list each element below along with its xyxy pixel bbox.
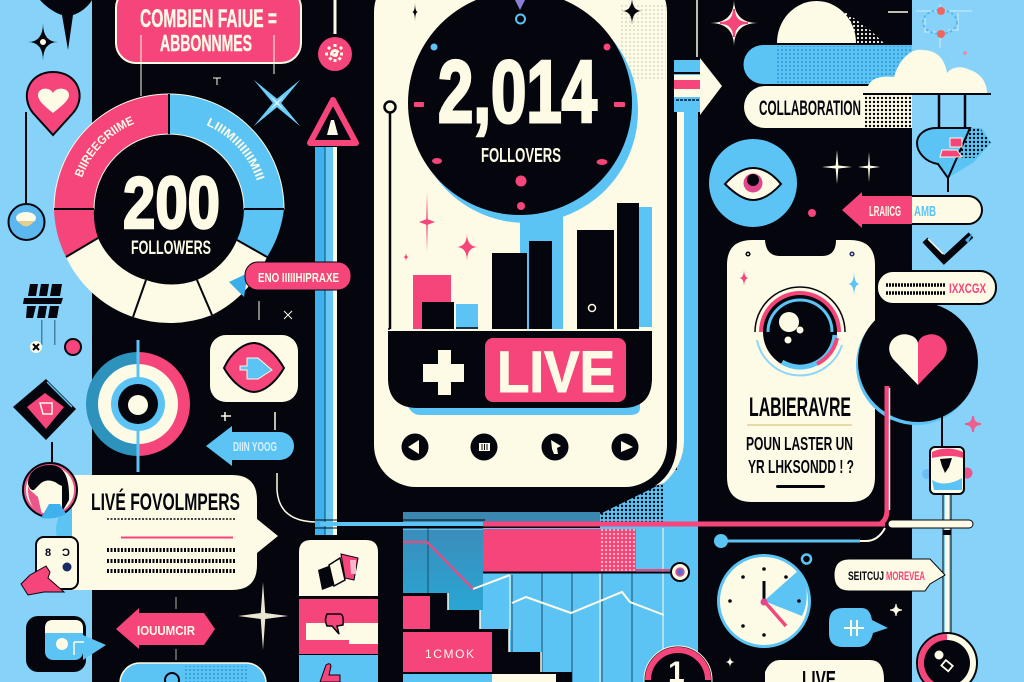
pink dot	[808, 209, 816, 217]
teal area	[403, 530, 483, 610]
phone cream outer edge	[655, 112, 684, 486]
bubble text lines	[107, 519, 235, 571]
label black: SEITCUJ	[848, 569, 884, 583]
sparkles	[739, 269, 749, 287]
heading: COMBIEN FAIUE =	[140, 5, 277, 33]
icon: blue star	[230, 56, 324, 150]
segment: pink lower left	[54, 209, 98, 257]
connector line	[25, 112, 27, 203]
label: COLLABORATION	[759, 97, 861, 120]
pink block	[483, 529, 601, 572]
stripe tab with arrow	[674, 0, 722, 115]
right phone	[727, 240, 875, 502]
halftone	[620, 5, 666, 80]
phone black edge	[600, 0, 677, 500]
bar chart	[388, 203, 652, 329]
icon: heart pin	[27, 72, 80, 135]
sparkle	[238, 582, 288, 650]
segment: cream bottom	[133, 280, 212, 323]
panel: central phone	[374, 0, 684, 500]
live button	[485, 338, 626, 402]
staircase	[403, 593, 572, 682]
pill: wave text	[877, 271, 996, 304]
icon: tiny phone	[922, 447, 972, 494]
pink step with label: 1CMOK	[425, 647, 474, 661]
phone line 2: YR LHKSONDD ! ?	[748, 457, 854, 477]
bubble heading: LIVÉ FOVOLMPERS	[91, 488, 240, 516]
icon: small phone with hand: Ͻ	[62, 547, 70, 559]
live text: LIVE	[497, 340, 615, 405]
grid lines	[428, 528, 632, 682]
icon: pink dot	[65, 339, 81, 355]
icon: laptop shield	[917, 128, 991, 192]
card: eye icon	[210, 335, 298, 402]
sparkle	[28, 23, 58, 61]
icon: circuit	[916, 4, 972, 55]
arrow: pink cream label	[842, 192, 982, 228]
end marker	[671, 563, 689, 581]
icon: hash	[23, 284, 63, 345]
vertical channel left	[315, 147, 337, 535]
sparkles	[822, 150, 880, 184]
speech: blue plus	[829, 608, 888, 647]
donut chart: 200 followers	[54, 94, 284, 323]
icon: diamond	[13, 379, 76, 440]
chart: stepped line area	[345, 110, 698, 682]
arrow: pink label: IOUUMCIR	[137, 623, 196, 638]
callout: pink pill: ENO IIIIIHIPRAXE	[258, 270, 339, 285]
icon: x dot	[30, 341, 42, 353]
count label: FOLLOWERS	[131, 238, 211, 259]
small marks	[213, 78, 292, 320]
badge: number 1	[644, 646, 712, 682]
arrow: blue label: DIIN YOOG	[233, 439, 277, 454]
label: cream arrow	[834, 559, 945, 591]
heading line 2: ABBONNMES	[160, 30, 252, 56]
right: top half circle	[777, 1, 884, 43]
shadow halftone	[600, 483, 663, 524]
clock dots	[414, 44, 625, 210]
pink step with label	[403, 632, 492, 672]
count: 200	[123, 163, 220, 244]
follower circle	[408, 0, 638, 223]
right vertical stem	[942, 415, 951, 634]
blue right column	[600, 470, 698, 530]
icon: bottom chat tile	[26, 616, 106, 672]
sparkle: pink	[710, 0, 758, 47]
icon: pink circle	[318, 0, 352, 71]
connector curve	[277, 473, 315, 522]
line chart	[403, 542, 664, 615]
phone heading: LABIERAVRE	[749, 392, 851, 422]
icon: eye circle	[709, 139, 797, 227]
arrow: pink label	[116, 608, 215, 649]
right: small marks	[888, 11, 908, 13]
divider	[747, 424, 852, 426]
segment: blue lower right	[237, 209, 284, 257]
pill: wave text: IXXCGX	[949, 280, 986, 296]
main timeline	[315, 386, 890, 528]
home bar	[776, 485, 825, 488]
top marker	[515, 0, 525, 10]
ring	[802, 554, 811, 564]
pill: bottom blue	[120, 663, 266, 682]
sparkles	[403, 0, 642, 262]
tile: thumbs	[299, 540, 378, 596]
phone body	[374, 0, 667, 487]
icon: warning triangle	[310, 100, 356, 143]
sparkle: pink right	[965, 416, 981, 432]
icon: small phone with hand: 8	[45, 547, 51, 559]
camera lens	[755, 287, 845, 377]
icon: cloud	[863, 50, 991, 127]
segment: pink top left	[54, 94, 169, 209]
pill: collaboration	[744, 86, 912, 128]
blue lower line	[714, 528, 885, 548]
big number label: FOLLOVERS	[481, 145, 561, 167]
icon: target donut	[86, 340, 190, 472]
blue blob behind bubble	[56, 508, 84, 552]
icon: blue circle	[8, 204, 44, 240]
label right: AMB	[914, 203, 936, 220]
icon: check mark	[925, 233, 973, 260]
stick marker	[384, 102, 396, 329]
arrow: blue label	[206, 426, 294, 466]
heart	[889, 334, 947, 385]
badge: bottom circle	[917, 633, 977, 682]
small plus	[221, 412, 275, 430]
tile: blue thumb	[299, 655, 378, 682]
pill: blue band	[744, 45, 912, 84]
cards: stacked tiles	[299, 540, 378, 682]
icon: small phone with hand	[21, 537, 78, 595]
sparkles	[725, 604, 902, 668]
big number: 2,014	[438, 42, 597, 141]
segment: cream left	[66, 238, 146, 317]
label pink: MOREVEA	[886, 569, 925, 583]
live bar	[388, 331, 652, 415]
segment: blue top right	[169, 94, 284, 209]
icon: black pin top	[40, 0, 92, 50]
timeline end cap	[888, 520, 973, 528]
tile: pink	[299, 599, 378, 654]
left column decorations	[8, 0, 92, 552]
pill: live bottom	[765, 660, 884, 682]
control buttons	[402, 434, 638, 460]
callout: pink pill	[229, 262, 351, 297]
panel: title	[116, 0, 301, 96]
black circle with heart	[856, 302, 978, 425]
dim band	[403, 512, 600, 524]
segment: cream right	[197, 240, 267, 315]
plus icon	[423, 350, 464, 395]
icon: clock	[718, 556, 810, 646]
pink step	[403, 596, 430, 629]
arc label blue: LIIIMIIIIIIIMIII	[206, 118, 264, 180]
speech bubble: live followers	[72, 475, 278, 590]
blue tab behind circle	[520, 200, 563, 329]
icon: avatar	[23, 463, 77, 518]
phone line 1: POUN LASTER UN	[746, 434, 853, 454]
arc label pink: BIIREEGRIIME	[74, 116, 134, 178]
label left: LRAIICG	[869, 203, 901, 220]
